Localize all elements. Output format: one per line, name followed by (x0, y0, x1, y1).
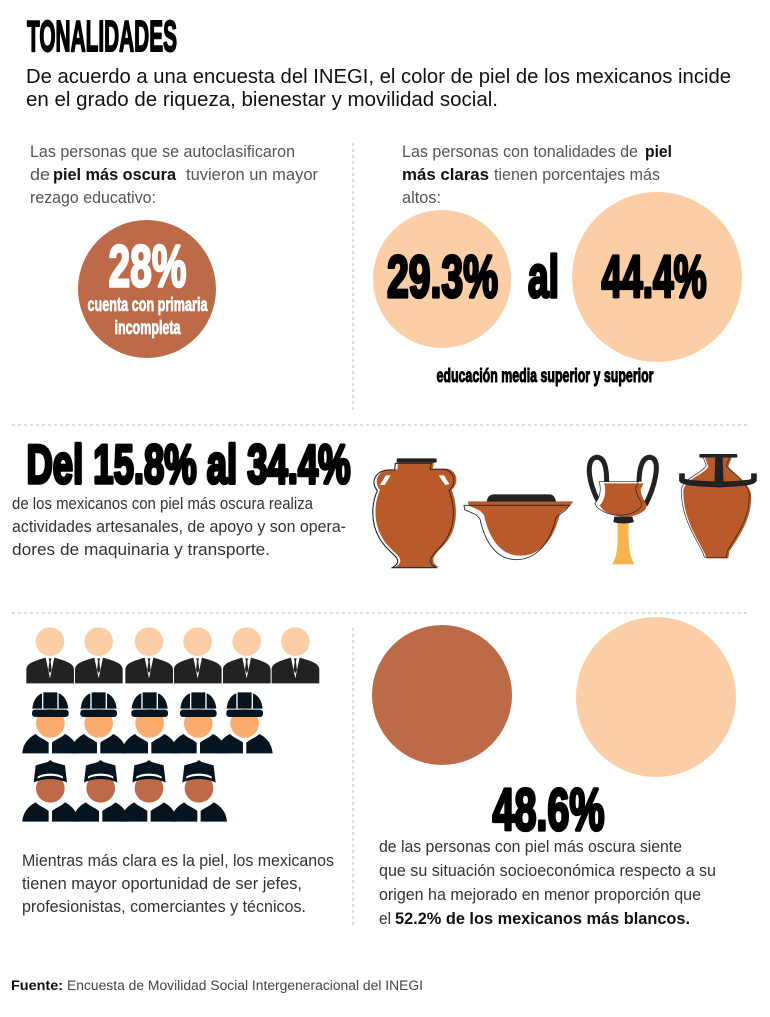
text: occupations description: profesionistas, comerciantes y técnicos. (22, 898, 306, 916)
icons: clay vessels (373, 454, 754, 568)
subtitle (26, 66, 731, 111)
icon: goblet (589, 457, 656, 564)
panel: socioeconomic improvement (372, 617, 736, 928)
text: improvement description: el (379, 910, 391, 928)
caption: education level: educación media superior y superior (436, 366, 654, 387)
text: lighter skin intro: altos: (402, 189, 441, 207)
panel: darker skin education (30, 143, 318, 358)
text: occupations description (22, 852, 334, 916)
text: artisan work description: actividades artesanales, de apoyo y son opera- (12, 518, 346, 536)
circle: 28 percent: cuenta con primaria (88, 295, 208, 316)
text: darker skin intro: de (30, 166, 50, 184)
text: improvement description: de las personas con piel más oscura siente (379, 838, 682, 856)
text: darker skin intro: piel más oscura (53, 166, 177, 184)
icon: wide bowl (464, 494, 573, 560)
row: cap workers (22, 760, 227, 822)
circle: lighter skin (576, 617, 736, 777)
source: Encuesta de Movilidad Social Intergeneracional del INEGI (67, 978, 423, 993)
text: improvement description: origen ha mejorado en menor proporción que (379, 886, 701, 904)
text: improvement description: 52.2% de los mexicanos más blancos. (395, 910, 690, 928)
text: lighter skin intro: más claras (402, 166, 489, 184)
big number: Del 15.8% al 34.4% (26, 433, 350, 495)
text: improvement description: que su situación socioeconómica respecto a su (379, 862, 716, 880)
big number: 48.6% (492, 777, 604, 843)
text: lighter skin intro: Las personas con tonalidades de (402, 143, 638, 161)
text: al: al (528, 244, 559, 310)
circle: 28 percent: 28% (108, 234, 186, 300)
pictogram: people by occupation (22, 627, 319, 822)
source: Fuente: (11, 978, 63, 993)
circle: 29.3 percent: 29.3% (387, 244, 498, 310)
text: artisan work description (12, 495, 346, 559)
icon: amphora with handles (373, 458, 456, 568)
text: lighter skin intro: piel (645, 143, 672, 161)
text: lighter skin intro (402, 143, 672, 207)
text: darker skin intro: Las personas que se autoclasificaron (30, 143, 295, 161)
row: executives (26, 627, 319, 683)
text: improvement description (379, 838, 716, 928)
text: darker skin intro: tuvieron un mayor (186, 166, 318, 184)
text: darker skin intro: rezago educativo: (30, 189, 156, 207)
circle: 28 percent (78, 220, 216, 358)
circle: 44.4 percent: 44.4% (602, 244, 706, 310)
subtitle: De acuerdo a una encuesta del INEGI, el color de piel de los mexicanos incide (26, 66, 731, 88)
panel: lighter skin education (373, 143, 742, 387)
panel: occupations by skin tone (22, 627, 334, 916)
text: artisan work description: de los mexicanos con piel más oscura realiza (12, 495, 314, 513)
subtitle: en el grado de riqueza, bienestar y movilidad social. (26, 89, 498, 111)
circle: 28 percent: incompleta (114, 318, 181, 339)
panel: artisan work (12, 433, 754, 568)
text: artisan work description: dores de maquinaria y transporte. (12, 541, 270, 559)
icon: tall jar (681, 454, 754, 558)
text: lighter skin intro: tienen porcentajes más (494, 166, 660, 184)
row: helmet workers (22, 692, 273, 753)
text: TONALIDADES (27, 12, 177, 61)
circle: 44.4 percent (572, 192, 742, 362)
circle: darker skin (372, 625, 512, 765)
circle: 29.3 percent (373, 210, 511, 348)
text: darker skin intro (30, 143, 318, 207)
text: occupations description: Mientras más clara es la piel, los mexicanos (22, 852, 334, 870)
text: occupations description: tienen mayor oportunidad de ser jefes, (22, 875, 302, 893)
